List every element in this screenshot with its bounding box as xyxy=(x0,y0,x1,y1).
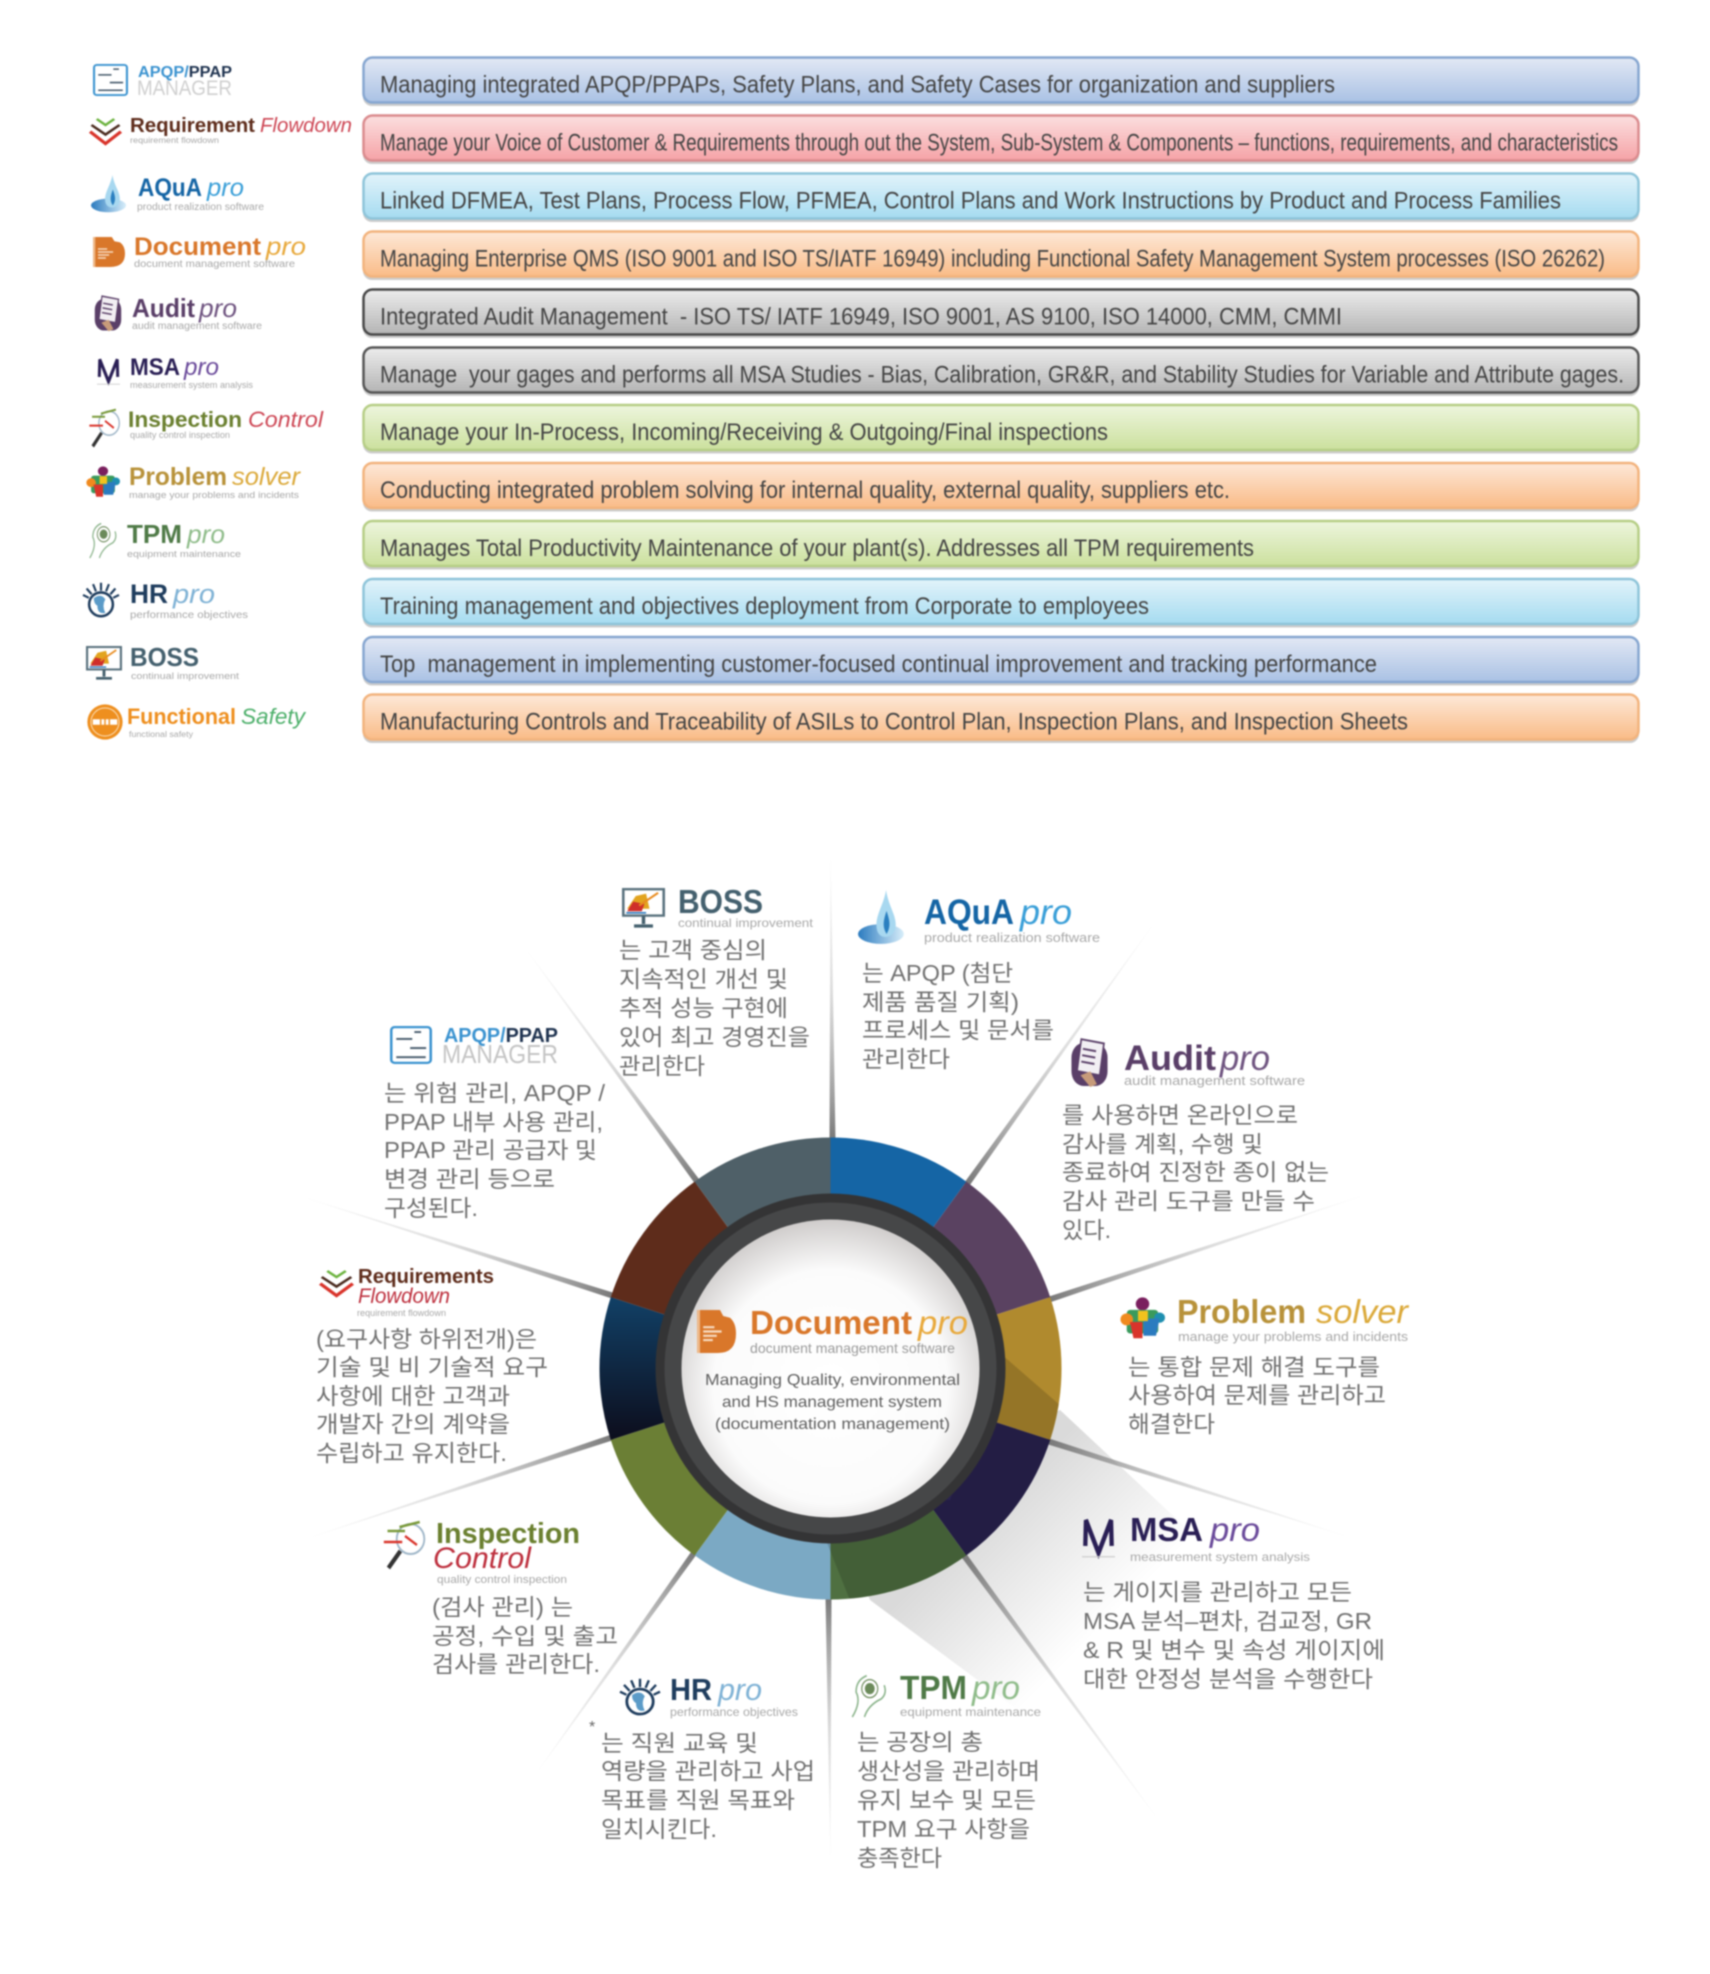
text: Audit description: 감사 관리 도구를 만들 수 xyxy=(1062,1188,1315,1214)
text: TPM description: 충족한다 xyxy=(857,1845,942,1871)
panel: Inspection Control xyxy=(384,1518,618,1677)
text: HR description xyxy=(601,1730,815,1842)
logo: Problem solver: manage your problems and incidents xyxy=(1178,1329,1409,1344)
logo: Audit pro xyxy=(95,293,262,332)
logo: Inspection Control: quality control inspection xyxy=(437,1574,567,1586)
logo: TPM pro: equipment maintenance xyxy=(127,549,241,559)
text: Inspection description xyxy=(432,1594,618,1677)
logo: Problem solver: Problem xyxy=(1177,1293,1306,1330)
text: Audit description: 감사를 계획, 수행 및 xyxy=(1062,1131,1263,1157)
logo: HR pro xyxy=(83,579,248,621)
text: TPM description xyxy=(857,1729,1040,1871)
logo: AQuA pro: product realization software xyxy=(924,930,1100,945)
text: MSA description: & R 및 변수 및 속성 게이지에 xyxy=(1083,1637,1385,1663)
text: APQP description: PPAP 관리 공급자 및 xyxy=(384,1137,597,1163)
logo: Audit pro xyxy=(1071,1039,1305,1088)
logo: HR pro: performance objectives xyxy=(130,610,248,621)
logo: Functional Safety xyxy=(87,704,307,740)
panel: product description bars xyxy=(363,58,1639,743)
text: Requirements description: (요구사항 하위전개)은 xyxy=(316,1326,537,1352)
logo: Requirement Flowdown xyxy=(90,115,352,145)
text: BOSS description: 있어 최고 경영진을 xyxy=(619,1024,810,1050)
asterisk: * xyxy=(589,1719,595,1736)
logo: HR pro: performance objectives xyxy=(670,1705,798,1719)
text: BOSS description: 는 고객 중심의 xyxy=(619,937,767,963)
panel: MSA pro xyxy=(1082,1511,1385,1692)
logo: HR pro: pro xyxy=(172,579,215,609)
bar: Audit pro: Integrated Audit Management - ISO TS/ IATF 16949, ISO 9001, AS 9100, ISO 14000, CMM, CMMI xyxy=(380,304,1342,330)
text: TPM description: 는 공장의 총 xyxy=(857,1729,983,1755)
text: Audit description: 를 사용하면 온라인으로 xyxy=(1062,1102,1298,1128)
panel: Requirements Flowdown xyxy=(316,1266,548,1466)
logo: Document pro: pro xyxy=(265,233,306,261)
logo: AQuA pro: pro xyxy=(1019,893,1072,932)
logo: Inspection Control xyxy=(89,407,324,446)
logo: TPM pro: TPM xyxy=(900,1669,967,1706)
logo: AQuA pro: pro xyxy=(206,174,244,202)
text: TPM description: 생산성을 관리하며 xyxy=(857,1758,1040,1784)
logo: BOSS: BOSS xyxy=(130,642,199,672)
text: APQP description: 는 위험 관리, APQP / xyxy=(384,1080,606,1106)
logo: MSA pro: measurement system analysis xyxy=(1130,1550,1310,1564)
text: Problem solver description: 해결한다 xyxy=(1128,1411,1215,1437)
logo: HR pro: HR xyxy=(130,579,168,609)
bar: APQP/PPAP Manager xyxy=(363,58,1639,106)
logo: Functional Safety: functional safety xyxy=(129,730,193,739)
text: AQuA description xyxy=(862,960,1054,1072)
logo: Audit pro: Audit xyxy=(132,293,195,323)
text: Requirements description: 수립하고 유지한다. xyxy=(316,1440,507,1466)
logo: APQP/PPAP Manager: MANAGER xyxy=(137,77,232,100)
panel: TPM pro xyxy=(852,1669,1041,1871)
logo: Document pro xyxy=(93,233,306,270)
text: Problem solver description: 사용하여 문제를 관리하고 xyxy=(1128,1382,1386,1408)
text: TPM description: TPM 요구 사항을 xyxy=(857,1816,1030,1842)
logo: Audit pro: pro xyxy=(198,293,237,323)
text: BOSS description: 지속적인 개선 및 xyxy=(619,966,788,992)
logo: Problem solver: solver xyxy=(1316,1293,1410,1330)
text: Inspection description: 검사를 관리한다. xyxy=(432,1651,600,1677)
logo: APQP/PPAP Manager: MANAGER xyxy=(442,1039,558,1069)
long shadow behind the wheel xyxy=(830,1410,1290,1760)
logo: TPM pro: equipment maintenance xyxy=(900,1705,1041,1719)
logo: Functional Safety: Safety xyxy=(241,704,307,729)
text: Problem solver description: 는 통합 문제 해결 도구를 xyxy=(1128,1354,1380,1380)
white centre disc xyxy=(682,1220,980,1518)
centre logo: Document pro: Document xyxy=(750,1304,912,1341)
text: Requirements description: 개발자 간의 계약을 xyxy=(316,1411,510,1437)
text: MSA description: 대한 안정성 분석을 수행한다 xyxy=(1083,1666,1373,1692)
bar: Functional Safety xyxy=(363,694,1639,743)
text: HR description: 일치시킨다. xyxy=(601,1816,717,1842)
text: MSA description xyxy=(1083,1579,1385,1692)
logo: Document pro: Document xyxy=(134,233,262,261)
logo: Requirement Flowdown: Requirement xyxy=(130,115,255,137)
text: AQuA description: 제품 품질 기획) xyxy=(862,989,1019,1015)
logo: Inspection Control: quality control inspection xyxy=(130,430,230,440)
text: Audit description: 있다. xyxy=(1062,1217,1111,1243)
logo: Requirements Flowdown: Requirements xyxy=(358,1266,494,1288)
bar: BOSS xyxy=(363,637,1639,686)
logo: TPM pro xyxy=(90,519,241,559)
logo: Functional Safety: Functional xyxy=(127,704,236,729)
logo: TPM pro: TPM xyxy=(127,519,182,549)
logo: Document pro: document management software xyxy=(134,259,295,270)
radial spokes xyxy=(290,844,1380,1870)
logo: Requirement Flowdown: requirement flowdown xyxy=(130,136,219,145)
logo: MSA pro: MSA xyxy=(130,354,180,381)
logo: TPM pro: pro xyxy=(186,519,225,549)
text: MSA description: 는 게이지를 관리하고 모든 xyxy=(1083,1579,1352,1605)
logo: BOSS xyxy=(87,642,240,681)
logo: HR pro xyxy=(620,1672,798,1719)
text: AQuA description: 관리한다 xyxy=(862,1046,950,1072)
logo: Inspection Control: Control xyxy=(248,407,324,432)
bar: BOSS: Top management in implementing customer-focused continual improvement and tracking performance xyxy=(380,651,1377,678)
text: APQP description: PPAP 내부 사용 관리, xyxy=(384,1109,603,1135)
logo: BOSS: continual improvement xyxy=(678,916,814,930)
centre description xyxy=(705,1372,960,1433)
bar: Requirement Flowdown xyxy=(363,116,1639,164)
bar: HR pro xyxy=(363,579,1639,628)
panel: product logo column xyxy=(83,64,352,740)
text: BOSS description: 추적 성능 구현에 xyxy=(619,995,788,1021)
panel: APQP/PPAP Manager xyxy=(384,1025,606,1221)
dark ring xyxy=(656,1194,1006,1544)
logo: Audit pro: pro xyxy=(1219,1039,1270,1078)
bar: Problem solver xyxy=(363,463,1639,512)
logo: Problem solver xyxy=(1120,1293,1410,1344)
text: MSA description: MSA 분석–편차, 검교정, GR xyxy=(1083,1608,1372,1634)
bar: HR pro: Training management and objectives deployment from Corporate to employees xyxy=(380,593,1149,620)
text: Inspection description: 공정, 수입 및 출고 xyxy=(432,1623,618,1649)
panel: Problem solver xyxy=(1120,1293,1410,1437)
bar: Audit pro xyxy=(363,290,1639,338)
bar: MSA pro xyxy=(363,348,1639,396)
logo: MSA pro: MSA xyxy=(1130,1511,1203,1548)
logo: Problem solver: Problem xyxy=(129,463,227,491)
centre logo: Document pro: document management software xyxy=(750,1340,955,1356)
logo: MSA pro xyxy=(97,354,254,390)
centre logo: Document pro xyxy=(697,1304,968,1356)
text: AQuA description: 프로세스 및 문서를 xyxy=(862,1017,1054,1043)
text: HR description: 역량을 관리하고 사업 xyxy=(601,1758,815,1784)
logo: BOSS xyxy=(623,883,814,930)
bar: AQuA pro xyxy=(363,174,1639,222)
logo: APQP/PPAP Manager xyxy=(94,64,232,100)
logo: MSA pro: measurement system analysis xyxy=(130,380,254,390)
wheel shadow overlay xyxy=(827,1358,1059,1598)
logo: Audit pro: Audit xyxy=(1124,1039,1216,1078)
logo: Requirements Flowdown: requirement flowdown xyxy=(357,1308,446,1318)
logo: APQP/PPAP Manager: APQP/PPAP xyxy=(444,1025,558,1047)
logo: TPM pro xyxy=(852,1669,1041,1719)
logo: Inspection Control: Inspection xyxy=(128,407,242,432)
text: Audit description: 종료하여 진정한 종이 없는 xyxy=(1062,1159,1329,1185)
logo: MSA pro: pro xyxy=(183,354,219,381)
panel: HR pro xyxy=(589,1672,815,1842)
logo: HR pro: pro xyxy=(717,1672,762,1707)
logo: HR pro: HR xyxy=(670,1672,712,1707)
text: Requirements description: 사항에 대한 고객과 xyxy=(316,1383,510,1409)
panel: AQuA pro xyxy=(858,890,1100,1072)
logo: Inspection Control: Inspection xyxy=(436,1518,580,1550)
panel: central wheel xyxy=(598,1136,1062,1600)
text: Requirements description xyxy=(316,1326,548,1466)
logo: APQP/PPAP Manager: APQP/PPAP xyxy=(138,64,232,81)
logo: MSA pro: pro xyxy=(1209,1511,1260,1548)
bar: APQP/PPAP Manager: Managing integrated APQP/PPAPs, Safety Plans, and Safety Cases for organization and suppliers xyxy=(380,72,1335,98)
bar: AQuA pro: Linked DFMEA, Test Plans, Process Flow, PFMEA, Control Plans and Work Instructions by Product and Process Families xyxy=(380,188,1561,214)
text: HR description: 는 직원 교육 및 xyxy=(601,1730,758,1756)
bar: TPM pro: Manages Total Productivity Maintenance of your plant(s). Addresses all TPM requirements xyxy=(380,535,1254,562)
logo: AQuA pro xyxy=(858,890,1100,945)
logo: Problem solver xyxy=(86,463,302,500)
panel: BOSS xyxy=(619,883,814,1079)
text: Problem solver description xyxy=(1128,1354,1386,1437)
text: Audit description xyxy=(1062,1102,1329,1243)
logo: TPM pro: pro xyxy=(971,1669,1020,1706)
bar: Problem solver: Conducting integrated problem solving for internal quality, external quality, suppliers etc. xyxy=(380,477,1230,504)
logo: AQuA pro: AQuA xyxy=(924,893,1014,932)
text: APQP description: 변경 관리 등으로 xyxy=(384,1166,555,1192)
logo: BOSS: continual improvement xyxy=(131,671,240,681)
logo: Audit pro: audit management software xyxy=(1124,1073,1305,1088)
logo: Requirement Flowdown: Flowdown xyxy=(260,115,352,137)
logo: Inspection Control xyxy=(384,1518,580,1586)
centre description: and HS management system xyxy=(722,1394,942,1411)
text: APQP description: 구성된다. xyxy=(384,1195,478,1221)
text: Requirements description: 기술 및 비 기술적 요구 xyxy=(316,1354,548,1380)
logo: Problem solver: manage your problems and incidents xyxy=(129,490,300,500)
centre logo: Document pro: pro xyxy=(917,1304,968,1341)
centre description: (documentation management) xyxy=(715,1416,950,1433)
bar: Inspection Control xyxy=(363,405,1639,454)
logo: AQuA pro xyxy=(91,174,264,213)
logo: AQuA pro: product realization software xyxy=(137,202,264,213)
logo: APQP/PPAP Manager xyxy=(391,1025,558,1069)
bar: Inspection Control: Manage your In-Process, Incoming/Receiving & Outgoing/Final inspections xyxy=(380,419,1108,446)
text: BOSS description: 관리한다 xyxy=(619,1053,705,1079)
bar: Functional Safety: Manufacturing Controls and Traceability of ASILs to Control Plan, Inspection Plans, and Inspection Sheets xyxy=(380,708,1408,736)
logo: Inspection Control: Control xyxy=(433,1542,532,1575)
text: BOSS description xyxy=(619,937,810,1079)
panel: Audit pro xyxy=(1062,1039,1329,1243)
logo: AQuA pro: AQuA xyxy=(138,174,202,202)
text: HR description: 목표를 직원 목표와 xyxy=(601,1787,795,1813)
bar: TPM pro xyxy=(363,521,1639,570)
logo: MSA pro xyxy=(1082,1511,1310,1564)
logo: Requirements Flowdown xyxy=(320,1266,494,1318)
text: AQuA description: 는 APQP (첨단 xyxy=(862,960,1013,986)
text: Inspection description: (검사 관리) 는 xyxy=(432,1594,573,1620)
centre description: Managing Quality, environmental xyxy=(705,1372,960,1389)
text: TPM description: 유지 보수 및 모든 xyxy=(857,1787,1036,1813)
logo: Audit pro: audit management software xyxy=(132,321,262,332)
logo: Requirements Flowdown: Flowdown xyxy=(358,1285,450,1308)
text: APQP description xyxy=(384,1080,606,1221)
bar: Document pro xyxy=(363,232,1639,280)
wheel segments xyxy=(599,1138,1062,1600)
logo: BOSS: BOSS xyxy=(678,883,763,920)
logo: Problem solver: solver xyxy=(232,463,302,491)
